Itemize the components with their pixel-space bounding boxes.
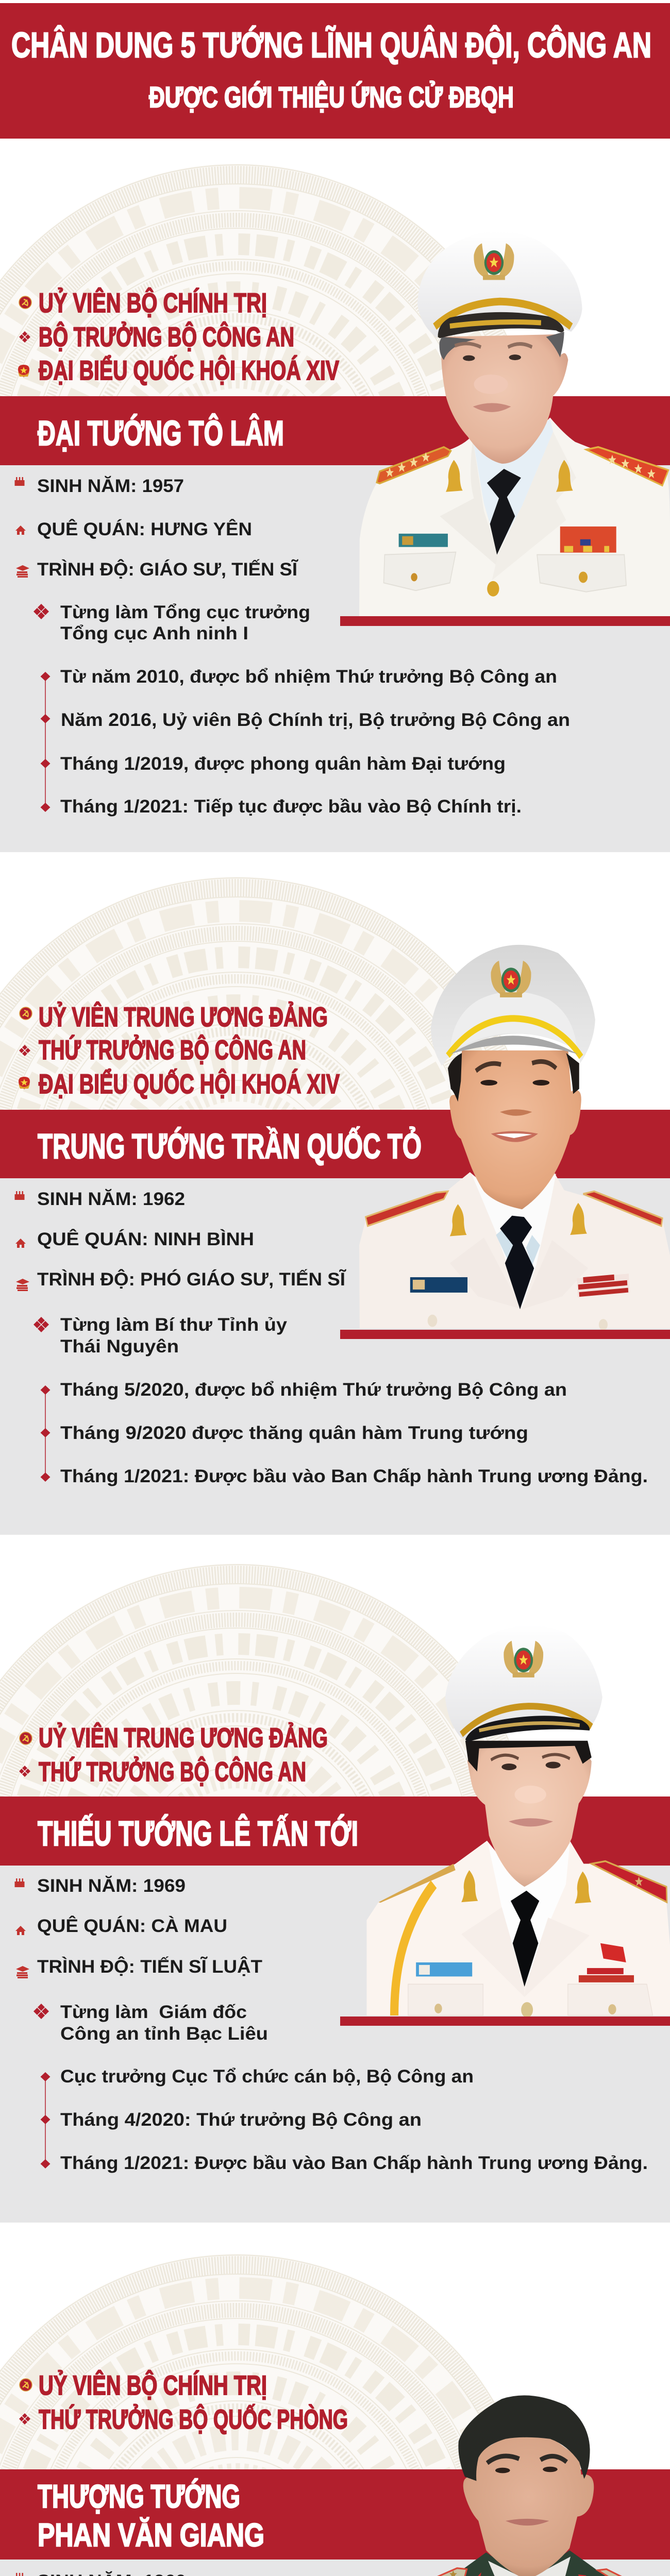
timeline entry: Tháng 1/2021: Được bầu vào Ban Chấp hành Trung ương Đảng. [60, 2153, 648, 2173]
panel: Đại tướng Tô Lâm [0, 164, 670, 852]
education: TRÌNH ĐỘ: GIÁO SƯ, TIẾN SĨ [37, 559, 298, 580]
icon: house [15, 1926, 26, 1935]
former post: Từng làm Giám đốc [60, 2002, 247, 2022]
timeline [40, 2066, 648, 2173]
role 2: THỨ TRƯỞNG BỘ CÔNG AN [39, 1034, 306, 1065]
icon: cake [14, 1878, 25, 1887]
former post: Tổng cục Anh ninh I [60, 623, 248, 643]
icon: cake [14, 477, 25, 486]
timeline entry: Năm 2016, Uỷ viên Bộ Chính trị, Bộ trưởng Bộ Công an [61, 710, 570, 730]
portrait: Tô Lâm [359, 231, 670, 617]
timeline entry: Từ năm 2010, được bổ nhiệm Thứ trưởng Bộ Công an [60, 667, 557, 687]
timeline entry: Tháng 1/2021: Được bầu vào Ban Chấp hành Trung ương Đảng. [60, 1466, 648, 1486]
portrait: Trần Quốc Tỏ [359, 945, 670, 1330]
name bar [0, 1797, 670, 1866]
role 1: UỶ VIÊN TRUNG ƯƠNG ĐẢNG [39, 1722, 328, 1753]
header banner [0, 3, 670, 139]
icon: party emblem [20, 2379, 32, 2391]
timeline entry: Tháng 4/2020: Thứ trưởng Bộ Công an [60, 2110, 422, 2130]
icon: diamonds [19, 1766, 30, 1777]
icon: diamond cluster [34, 1317, 49, 1332]
icon: books [16, 565, 29, 578]
bronze drum watermark [0, 164, 507, 396]
personal facts [14, 476, 298, 580]
info background [0, 1178, 670, 1535]
icon: cake [14, 2573, 25, 2576]
name: TRUNG TƯỚNG TRẦN QUỐC TỎ [38, 1126, 422, 1166]
title line 2: ĐƯỢC GIỚI THIỆU ỨNG CỬ ĐBQH [149, 80, 514, 114]
bronze drum watermark [0, 1564, 510, 1797]
timeline entry: Tháng 1/2019, được phong quân hàm Đại tướng [60, 754, 506, 774]
icon: house [15, 1239, 26, 1248]
icon: party emblem [20, 1007, 32, 1020]
timeline entry: Cục trưởng Cục Tổ chức cán bộ, Bộ Công an [60, 2066, 474, 2087]
former post [60, 602, 310, 643]
portrait: Lê Tấn Tới [366, 1625, 670, 2018]
roles list [18, 287, 339, 386]
timeline [40, 667, 570, 817]
role 2: BỘ TRƯỞNG BỘ CÔNG AN [39, 321, 294, 352]
hometown: QUÊ QUÁN: NINH BÌNH [37, 1229, 254, 1249]
icon: books [16, 1279, 29, 1291]
birth year: SINH NĂM: 1957 [37, 476, 184, 496]
roles list [19, 2369, 348, 2435]
panel: Thượng tướng Phan Văn Giang [0, 2254, 670, 2576]
name: ĐẠI TƯỚNG TÔ LÂM [38, 413, 284, 453]
former post: Thái Nguyên [60, 1336, 179, 1357]
roles list [19, 1722, 328, 1787]
birth year: SINH NĂM: 1969 [37, 1876, 186, 1896]
icon: diamond cluster [34, 604, 49, 619]
role 2: THỨ TRƯỞNG BỘ CÔNG AN [39, 1756, 306, 1787]
role 1: UỶ VIÊN BỘ CHÍNH TRỊ [39, 2369, 267, 2401]
role 1: UỶ VIÊN TRUNG ƯƠNG ĐẢNG [39, 1001, 328, 1032]
icon: party emblem [20, 1732, 32, 1744]
personal facts [14, 1876, 262, 1978]
former post [60, 1315, 288, 1357]
former post: Công an tỉnh Bạc Liêu [60, 2024, 268, 2044]
personal facts [14, 2571, 326, 2576]
education: TRÌNH ĐỘ: PHÓ GIÁO SƯ, TIẾN SĨ [37, 1269, 346, 1290]
accent stripe [340, 616, 670, 626]
hometown: QUÊ QUÁN: HƯNG YÊN [37, 519, 252, 539]
panel: Thiếu tướng Lê Tấn Tới [0, 1564, 670, 2223]
former post: Từng làm Tổng cục trưởng [60, 602, 310, 622]
name bar [0, 2469, 670, 2560]
icon: party emblem [19, 296, 31, 309]
former post [60, 2002, 268, 2044]
name bar [0, 396, 670, 465]
timeline entry: Tháng 1/2021: Tiếp tục được bầu vào Bộ Chính trị. [60, 796, 522, 817]
icon: books [16, 1966, 29, 1978]
name [38, 2479, 264, 2553]
icon: national emblem [18, 365, 29, 377]
timeline entry: Tháng 5/2020, được bổ nhiệm Thứ trưởng Bộ Công an [60, 1380, 567, 1400]
bronze drum watermark [0, 2254, 495, 2469]
role 3: ĐẠI BIỂU QUỐC HỘI KHOÁ XIV [39, 354, 339, 386]
accent stripe [340, 1330, 670, 1339]
icon: diamond cluster [34, 2004, 49, 2019]
icon: diamonds [19, 1045, 30, 1056]
role 1: UỶ VIÊN BỘ CHÍNH TRỊ [39, 287, 267, 318]
roles list [19, 1001, 340, 1099]
info background [0, 1866, 670, 2223]
timeline entry: Tháng 9/2020 được thăng quân hàm Trung tướng [60, 1423, 528, 1443]
personal facts [14, 1189, 346, 1291]
hometown: QUÊ QUÁN: CÀ MAU [37, 1916, 227, 1936]
name: THƯỢNG TƯỚNG [38, 2479, 240, 2515]
education: TRÌNH ĐỘ: TIẾN SĨ LUẬT [37, 1956, 262, 1977]
name bar [0, 1110, 670, 1178]
icon: house [15, 526, 26, 535]
icon: cake [14, 1191, 25, 1200]
role 3: ĐẠI BIỂU QUỐC HỘI KHOÁ XIV [39, 1068, 340, 1099]
icon: diamonds [19, 2413, 30, 2425]
panel: Trung tướng Trần Quốc Tỏ [0, 877, 670, 1535]
bronze drum watermark [0, 877, 508, 1110]
name: PHAN VĂN GIANG [38, 2517, 264, 2553]
info background [0, 2560, 670, 2576]
icon: national emblem [19, 1077, 30, 1089]
icon: diamonds [19, 331, 30, 343]
role 2: THỨ TRƯỞNG BỘ QUỐC PHÒNG [39, 2403, 348, 2435]
former post: Từng làm Bí thư Tỉnh ủy [60, 1315, 288, 1335]
name: THIẾU TƯỚNG LÊ TẤN TỚI [38, 1814, 358, 1853]
birth year: SINH NĂM: 1962 [37, 1189, 185, 1209]
portrait: Phan Văn Giang [373, 2395, 670, 2576]
accent stripe [340, 2016, 670, 2026]
info background [0, 465, 670, 852]
timeline [40, 1380, 648, 1486]
